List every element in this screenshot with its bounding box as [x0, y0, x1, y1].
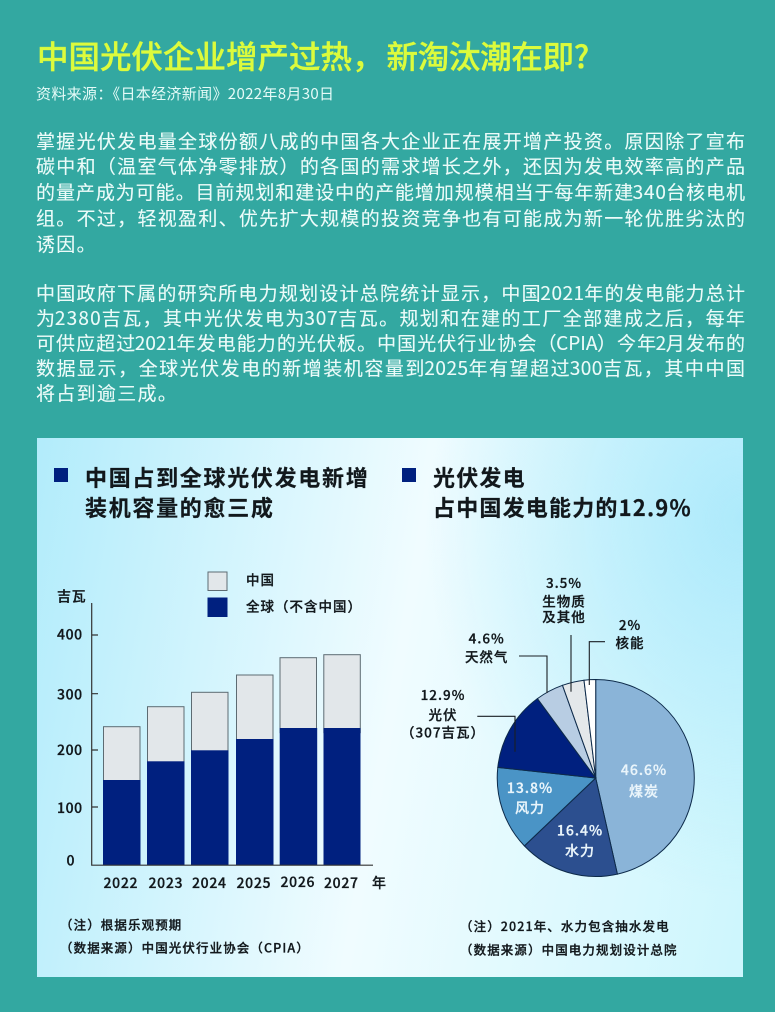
legend: 全球（不含中国）	[246, 596, 362, 616]
slice: solar	[498, 699, 596, 778]
pie labels: inside: 16.4%	[557, 820, 603, 840]
axis labels: 100	[57, 798, 83, 818]
notes: pie chart	[460, 916, 678, 958]
text block: paragraph 2: 中国政府下属的研究所电力规划设计总院统计显示，中国2021年的发电能力总计	[36, 278, 745, 306]
pie labels: inside: 水力	[565, 841, 595, 861]
pie labels: outside: 12.9%	[421, 684, 465, 704]
legend	[208, 569, 362, 617]
text block: paragraph 2	[36, 278, 745, 406]
pie labels: outside: 及其他	[542, 606, 586, 626]
pie labels: outside	[401, 572, 644, 742]
text block: paragraph 1: 碳中和（温室气体净零排放）的各国的需求增长之外，还因为发电效率高的产品	[36, 152, 745, 179]
slice: biomass	[562, 680, 596, 778]
leader lines	[477, 635, 605, 752]
text block: paragraph 2: 将占到逾三成。	[36, 378, 178, 406]
pie labels: outside: 3.5%	[546, 572, 582, 592]
axis labels: 400	[57, 624, 83, 644]
text block: paragraph 1	[36, 126, 745, 257]
slice: wind	[497, 767, 596, 846]
legend: 中国	[246, 569, 275, 589]
panel: charts background	[37, 438, 743, 977]
year labels: 2023	[148, 873, 183, 893]
pie labels: outside: 天然气	[465, 646, 508, 666]
notes: pie chart: （数据来源）中国电力规划设计总院	[460, 940, 678, 958]
bar chart	[57, 569, 387, 893]
text block: paragraph 2: 数据显示，全球光伏发电的新增装机容量到2025年有望超过300吉瓦，其中中国	[36, 354, 745, 380]
year labels: 2026	[280, 872, 315, 892]
axis labels: 200	[57, 740, 83, 760]
bars: world excluding china	[103, 728, 360, 865]
year labels: 2025	[236, 873, 271, 893]
notes: bar chart: （注）根据乐观预期	[60, 914, 182, 934]
notes: bar chart	[60, 914, 310, 956]
pie labels: inside: 13.8%	[507, 778, 553, 798]
pie labels: inside: 煤炭	[629, 782, 659, 802]
text block: paragraph 2: 可供应超过2021年发电能力的光伏板。中国光伏行业协会（CPIA）今年2月发布的	[36, 328, 745, 356]
text block: paragraph 1: 的量产成为可能。目前规划和建设中的产能增加规模相当于每年新建340台核电机	[36, 178, 745, 205]
slice: nuclear	[584, 680, 596, 778]
source line: 资料来源：《日本经济新闻》2022年8月30日	[36, 83, 334, 104]
heading: right chart: 光伏发电	[433, 461, 526, 493]
axes	[92, 603, 373, 865]
axis labels: 吉瓦	[57, 586, 86, 606]
year labels: 2027	[324, 873, 359, 893]
text block: paragraph 1: 组。不过，轻视盈利、优先扩大规模的投资竞争也有可能成为新一轮优胜劣汰的	[36, 204, 745, 231]
heading: left chart: 装机容量的愈三成	[85, 491, 275, 523]
pie labels: outside: 核能	[616, 632, 644, 652]
heading: left chart	[54, 461, 369, 523]
text block: paragraph 1: 诱因。	[36, 230, 97, 257]
pie labels: inside	[507, 760, 667, 861]
slice: coal	[596, 679, 694, 874]
heading: right chart	[402, 461, 692, 523]
year labels: 2022	[104, 873, 138, 893]
pie labels: outside: 4.6%	[469, 628, 505, 648]
pie labels: outside: 光伏	[428, 704, 458, 724]
pie labels: outside: 2%	[619, 614, 641, 634]
pie labels: inside: 46.6%	[621, 760, 667, 780]
bars: china	[104, 655, 360, 787]
pie labels: inside: 风力	[515, 798, 545, 818]
text block: paragraph 1: 掌握光伏发电量全球份额八成的中国各大企业正在展开增产投资。原因除了宣布	[36, 126, 745, 154]
year labels: 2024	[192, 873, 227, 893]
pie chart	[497, 679, 694, 877]
title: 中国光伏企业增产过热，新淘汰潮在即?	[37, 32, 589, 78]
pie labels: outside: （307吉瓦）	[401, 722, 485, 742]
notes: bar chart: （数据来源）中国光伏行业协会（CPIA）	[60, 938, 310, 956]
text block: paragraph 2: 为2380吉瓦，其中光伏发电为307吉瓦。规划和在建的工厂全部建成之后，每年	[36, 304, 745, 330]
axis labels: 300	[57, 684, 83, 704]
year labels: 年	[372, 873, 387, 893]
pie labels: outside: 生物质	[542, 590, 586, 610]
slice: gas	[537, 685, 596, 778]
notes: pie chart: （注）2021年、水力包含抽水发电	[460, 916, 670, 935]
axis labels: 0	[66, 850, 75, 870]
axis labels	[57, 586, 86, 870]
heading: left chart: 中国占到全球光伏发电新增	[85, 461, 369, 493]
year labels	[104, 872, 387, 893]
slice: hydro	[524, 778, 617, 877]
heading: right chart: 占中国发电能力的12.9%	[433, 491, 692, 523]
